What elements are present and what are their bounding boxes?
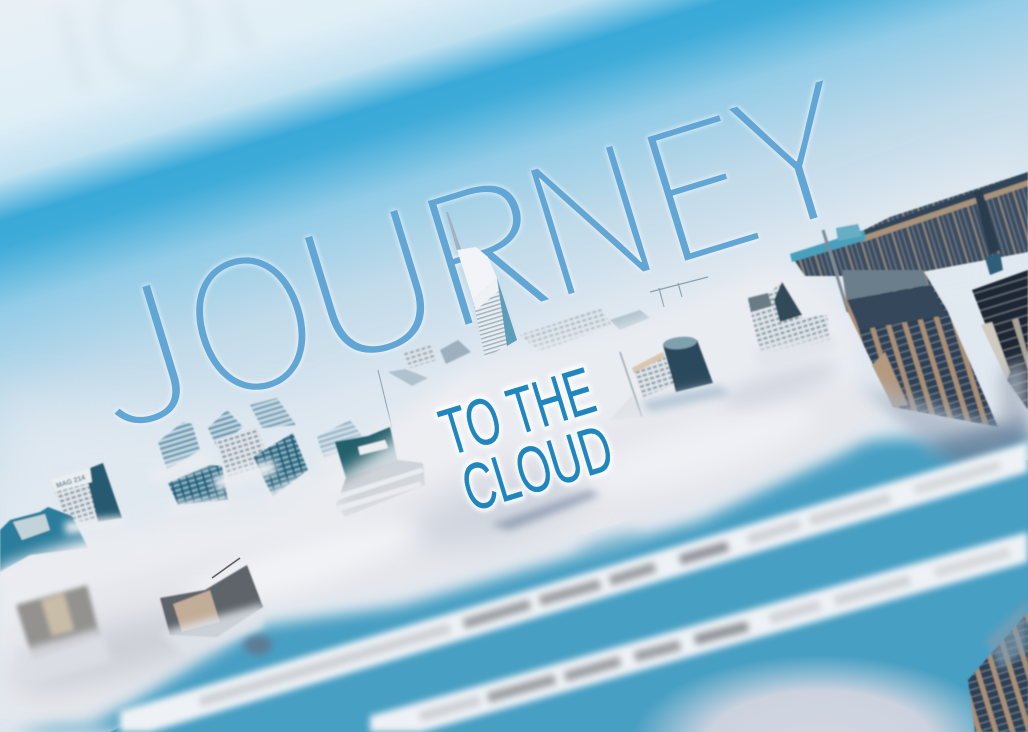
- title: JOURNEY: N: [490, 68, 684, 350]
- black tower right: [972, 270, 1028, 410]
- brown building with crane: [160, 558, 263, 637]
- subtitle glow: CLOUD: [453, 410, 621, 526]
- lower right building: [968, 612, 1028, 732]
- title: JOURNEY: [50, 6, 877, 482]
- tan block: [632, 352, 675, 397]
- bar background: [370, 532, 1028, 732]
- teal cluster far left: [0, 507, 88, 572]
- white skyscraper: [446, 212, 517, 358]
- low teal building: [168, 465, 228, 505]
- title: JOURNEY: R: [385, 100, 570, 380]
- spire building: [748, 282, 830, 352]
- subtitle: TO THE CLOUD: TO THE: [432, 354, 603, 470]
- tan tower: [215, 427, 270, 478]
- distant skyline: [317, 277, 708, 462]
- lower right cloud: [620, 650, 1028, 732]
- title: JOURNEY: U: [262, 130, 471, 417]
- fog band between mid buildings: [0, 375, 476, 650]
- fog at bases of left cluster: [0, 445, 368, 580]
- blurred words: [420, 552, 1010, 717]
- back fog layer: [300, 269, 860, 560]
- teal ground colour: [0, 430, 1028, 732]
- tower: [208, 410, 243, 447]
- long navy building top right: [790, 172, 1028, 276]
- title: JOURNEY: E: [605, 39, 783, 317]
- big tan tower: [823, 230, 998, 427]
- blurred ghost lettering top left: [62, 0, 250, 93]
- far buildings beside the tower: [317, 308, 650, 462]
- soft teal edge: [0, 430, 1028, 732]
- fade over base of big tower: [860, 385, 1010, 450]
- dark blur under brown building: [244, 635, 272, 655]
- blue fog shadow under round building: [640, 385, 730, 412]
- pale horizon haze: [0, 150, 1028, 620]
- tower: [158, 422, 200, 470]
- dusky band above first bar: [930, 415, 1028, 470]
- solid teal core: [110, 460, 1028, 732]
- blurred tan building: [16, 585, 100, 660]
- pointed tent roof and mast: [610, 395, 650, 420]
- fade over bases of towers: [140, 478, 350, 552]
- haze over top of lower right building: [985, 600, 1028, 670]
- title: JOURNEY: O: [149, 171, 346, 454]
- lower blurred buildings: [15, 558, 272, 685]
- fog across building bases: [15, 628, 112, 685]
- subtitle shadow: [490, 490, 600, 530]
- subtitle glow: [432, 354, 621, 526]
- subtitle: TO THE CLOUD: CLOUD: [453, 410, 621, 526]
- blurred text bar two: [370, 532, 1028, 732]
- MAG tower: [50, 463, 122, 523]
- subtitle glow: TO THE: [432, 354, 603, 470]
- cylinder: [663, 340, 713, 392]
- bar background: [120, 442, 1028, 732]
- round-top building group: [610, 335, 713, 420]
- title: JOURNEY: Y: [706, 6, 877, 282]
- MAG tower sign: MAG 214: [56, 474, 86, 490]
- blurred words: [200, 465, 1000, 702]
- left cluster of towers: [0, 398, 308, 572]
- teal and white tower: [253, 433, 308, 497]
- blurred text bar one: [120, 442, 1028, 732]
- fog shading blotches: [7, 354, 841, 707]
- subtitle: TO THE CLOUD: [432, 354, 621, 526]
- construction cranes: [378, 277, 708, 428]
- main front fog: [0, 385, 880, 728]
- tower: [250, 398, 296, 428]
- dark teal central tower: [335, 427, 425, 517]
- title: JOURNEY: J: [50, 206, 224, 482]
- fog at spire building base: [752, 335, 835, 368]
- fade over black tower: [1000, 360, 1028, 430]
